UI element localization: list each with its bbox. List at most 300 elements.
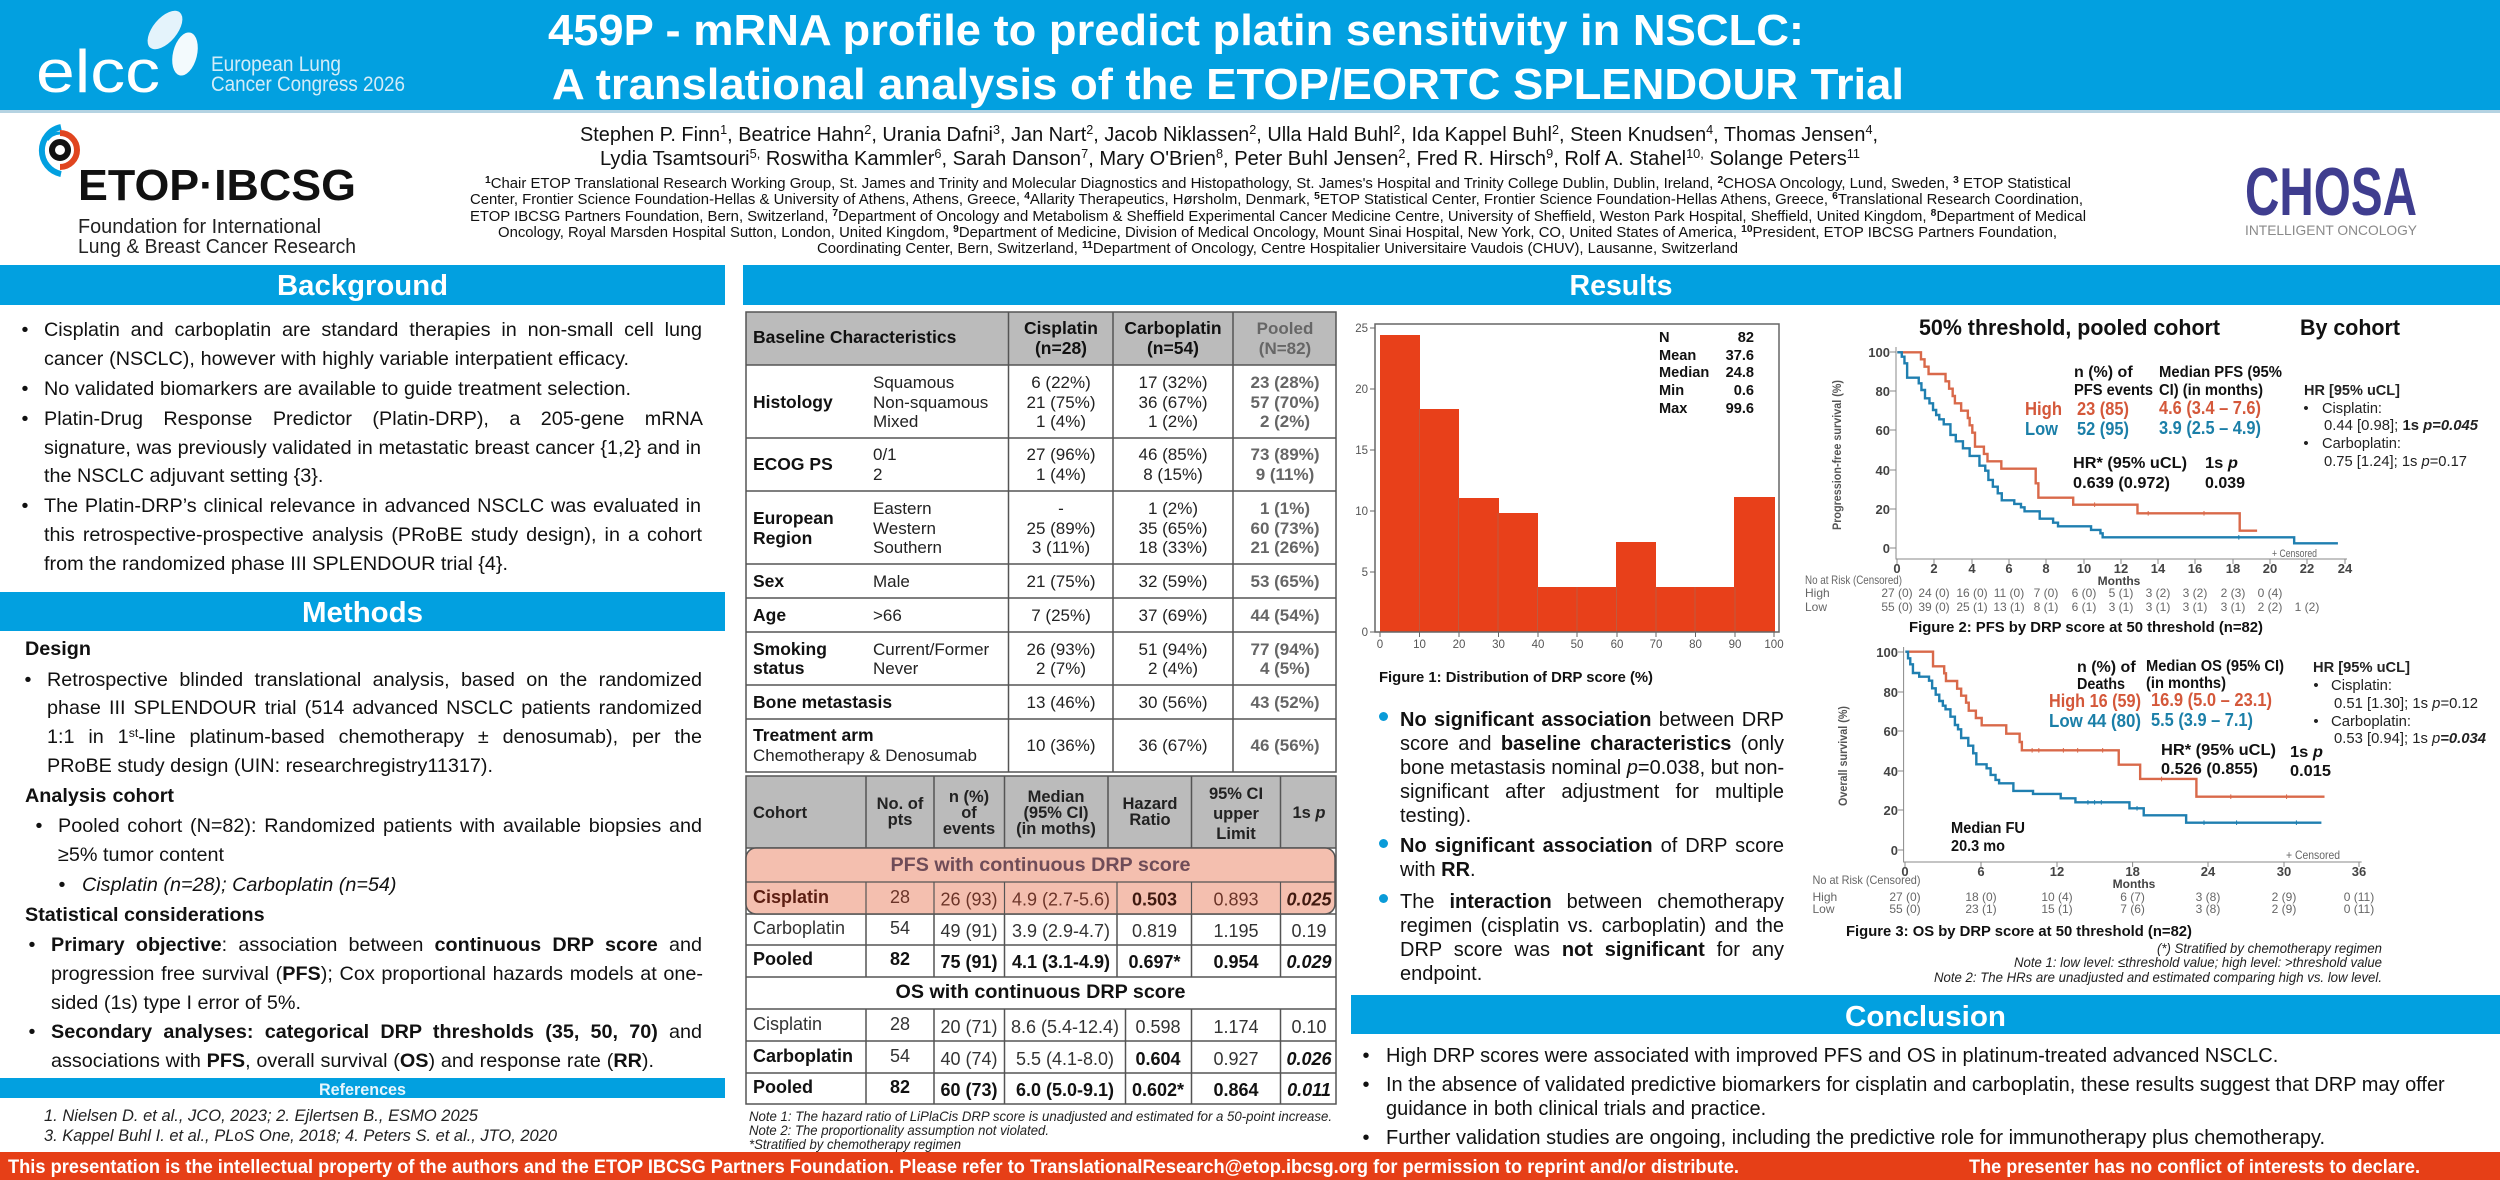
authors: , Steen Knudsen bbox=[1559, 123, 1706, 146]
histogram: DRP score distribution: 90 bbox=[1729, 639, 1741, 651]
panel: methods text: phase III SPLENDOUR trial (514 advanced NSCLC patients randomized bbox=[47, 697, 702, 719]
table: baseline characteristics: 26 (93%) bbox=[1027, 640, 1095, 659]
authors: 2 bbox=[1552, 122, 1559, 137]
table: baseline characteristics: 4 (5%) bbox=[1260, 659, 1310, 678]
footer bar: This presentation is the intellectual property of the authors and the ETOP IBCSG Partners Foundation. Please refer to TranslationalResearch@etop.ibcsg.org for permission to reprint and/or distribute. bbox=[8, 1156, 1739, 1178]
references list: 1. Nielsen D. et al., JCO, 2023; 2. Ejlertsen B., ESMO 2025 bbox=[44, 1107, 479, 1125]
chart: PFS Kaplan-Meier: 60 bbox=[1876, 423, 1890, 438]
highlight: cisplatin PFS row: Cisplatin bbox=[753, 887, 829, 907]
heading: Methods bbox=[0, 592, 725, 631]
authors: 9 bbox=[1546, 146, 1553, 161]
chart: PFS Kaplan-Meier: 8 bbox=[2042, 561, 2050, 576]
panel: results bullets: DRP score was not significant for any bbox=[1400, 939, 1784, 961]
table: baseline characteristics: 2 (4%) bbox=[1148, 659, 1198, 678]
chart: OS Kaplan-Meier: 100 bbox=[1876, 645, 1898, 660]
panel: results bullets: with RR. bbox=[1400, 859, 1476, 881]
table notes: Note 1: The hazard ratio of LiPlaCis DRP score is unadjusted and estimated for a 50-point increase. bbox=[749, 1108, 1332, 1124]
callout: OS statistics: n (%) of bbox=[2077, 659, 2136, 676]
callout: PFS statistics: 1s p bbox=[2205, 455, 2238, 472]
chart: PFS Kaplan-Meier: 18 bbox=[2226, 561, 2240, 576]
chart: OS Kaplan-Meier bbox=[1812, 645, 2374, 916]
table: baseline characteristics: Bone metastasis bbox=[753, 692, 892, 712]
table: cohort hazard ratios: Hazard bbox=[1122, 795, 1178, 813]
callout: PFS statistics: High bbox=[2025, 399, 2062, 419]
subheading: 50% threshold: 50% threshold, pooled cohort bbox=[1919, 315, 2221, 340]
table: cohort hazard ratios: 0.864 bbox=[1213, 1080, 1259, 1100]
panel: background text: • bbox=[22, 378, 28, 400]
references list bbox=[44, 1107, 558, 1145]
table: baseline characteristics: 1 (4%) bbox=[1036, 465, 1086, 484]
chart: PFS Kaplan-Meier: + Censored bbox=[2272, 548, 2317, 560]
chart: PFS Kaplan-Meier: 100 bbox=[1868, 345, 1890, 360]
panel: conclusion bullets bbox=[1362, 1045, 2445, 1149]
header banner bbox=[0, 0, 2500, 113]
histogram: DRP score distribution: 0 bbox=[1362, 627, 1368, 639]
chart: OS Kaplan-Meier: 12 bbox=[2050, 864, 2064, 879]
panel: results bullets: testing). bbox=[1400, 805, 1471, 827]
callout: OS by cohort: • bbox=[2313, 677, 2319, 694]
chart: OS Kaplan-Meier: 40 bbox=[1884, 764, 1898, 779]
chart: OS Kaplan-Meier: 0 bbox=[1901, 864, 1909, 879]
affiliations: 2 bbox=[1717, 175, 1724, 186]
panel: results bullets: significant after adjustment for multiple bbox=[1400, 781, 1784, 803]
chart: PFS Kaplan-Meier: Months bbox=[2098, 574, 2141, 588]
highlight: cisplatin PFS row: 26 (93) bbox=[940, 890, 998, 910]
callout: OS statistics: Median FU bbox=[1951, 820, 2025, 837]
table: baseline characteristics: 30 (56%) bbox=[1139, 693, 1207, 712]
affiliations: 1 bbox=[485, 175, 491, 186]
chart: PFS Kaplan-Meier: 24 bbox=[2338, 561, 2353, 576]
callout: PFS statistics: 4.6 (3.4 – 7.6) bbox=[2159, 398, 2261, 418]
table: cohort hazard ratios: of bbox=[961, 804, 977, 822]
table: PFS numbers at risk: 16 (0) bbox=[1956, 586, 1988, 600]
table: cohort hazard ratios: 0.819 bbox=[1132, 921, 1177, 941]
panel: background text bbox=[22, 319, 703, 575]
callout: PFS by cohort: • bbox=[2303, 435, 2309, 452]
authors: 2 bbox=[1249, 122, 1256, 137]
table: cohort hazard ratios: No. of bbox=[877, 795, 924, 813]
chart: PFS Kaplan-Meier: 0 bbox=[1893, 561, 1901, 576]
table: cohort hazard ratios: 3.9 (2.9-4.7) bbox=[1012, 921, 1110, 941]
affiliations: Allarity Therapeutics, Hørsholm, Denmark, bbox=[1030, 192, 1314, 208]
chart: PFS Kaplan-Meier: 2 bbox=[1930, 561, 1938, 576]
summary statistics: Min bbox=[1659, 383, 1684, 399]
chart: PFS Kaplan-Meier: 16 bbox=[2188, 561, 2202, 576]
table: PFS numbers at risk: 25 (1) bbox=[1956, 600, 1988, 614]
table: baseline characteristics: 2 bbox=[873, 465, 882, 484]
panel: conclusion bullets: • bbox=[1362, 1074, 1370, 1096]
table: OS numbers at risk: 55 (0) bbox=[1889, 902, 1921, 916]
heading: Results: Results bbox=[1570, 270, 1672, 302]
table: cohort hazard ratios: Carboplatin bbox=[753, 918, 845, 938]
table: baseline characteristics: Carboplatin bbox=[1124, 318, 1222, 338]
table: cohort hazard ratios: Ratio bbox=[1129, 811, 1171, 829]
histogram: DRP score distribution: 60 bbox=[1611, 639, 1623, 651]
callout: OS by cohort: 0.53 [0.94]; 1s p=0.034 bbox=[2334, 730, 2487, 747]
table: cohort hazard ratios: pts bbox=[888, 811, 912, 829]
affiliations bbox=[470, 175, 2086, 257]
table: cohort hazard ratios: 0.19 bbox=[1291, 921, 1327, 941]
table: baseline characteristics: Male bbox=[873, 572, 910, 591]
panel: methods text: • bbox=[24, 669, 31, 691]
callout: PFS by cohort bbox=[2303, 382, 2479, 470]
affiliations: Department of Oncology, Centre Hospitalier Universitaire Vaudois (CHUV), Lausanne, Switzerland bbox=[1093, 241, 1738, 257]
chart: PFS Kaplan-Meier: 22 bbox=[2300, 561, 2314, 576]
panel: background text: No validated biomarkers are available to guide treatment selection. bbox=[44, 378, 631, 400]
title: 459P - mRNA profile to predict platin sensitivity in NSCLC: bbox=[548, 6, 1804, 55]
table notes: *Stratified by chemotherapy regimen bbox=[749, 1136, 961, 1152]
heading: References: References bbox=[319, 1080, 406, 1099]
chart: OS Kaplan-Meier: 60 bbox=[1884, 724, 1898, 739]
summary statistics: 37.6 bbox=[1726, 348, 1754, 364]
callout: PFS statistics: Low bbox=[2025, 419, 2059, 439]
table: cohort hazard ratios: 4.1 (3.1-4.9) bbox=[1012, 952, 1110, 972]
table: baseline characteristics: Cisplatin bbox=[1024, 318, 1098, 338]
table: PFS numbers at risk: 8 (1) bbox=[2034, 600, 2058, 614]
table: cohort hazard ratios: 20 (71) bbox=[940, 1017, 998, 1037]
table: PFS numbers at risk: High bbox=[1805, 586, 1830, 600]
histogram: DRP score distribution bbox=[1355, 323, 1784, 651]
histogram: DRP score distribution: 10 bbox=[1355, 506, 1368, 518]
callout: OS statistics: Low 44 (80) bbox=[2049, 711, 2141, 731]
table: cohort hazard ratios: 28 bbox=[890, 1014, 910, 1034]
table: baseline characteristics: Chemotherapy & Denosumab bbox=[753, 746, 977, 765]
affiliations: ETOP IBCSG Partners Foundation, Bern, Switzerland, bbox=[470, 209, 819, 225]
histogram: DRP score distribution: 30 bbox=[1492, 639, 1505, 651]
authors bbox=[580, 122, 1878, 170]
references list: 3. Kappel Buhl I. et al., PLoS One, 2018; 4. Peters S. et al., JTO, 2020 bbox=[44, 1127, 558, 1145]
table: OS numbers at risk: No at Risk (Censored) bbox=[1812, 873, 1920, 887]
chart: PFS Kaplan-Meier: 20 bbox=[2263, 561, 2277, 576]
table: cohort hazard ratios: Pooled bbox=[753, 949, 813, 969]
authors: 1 bbox=[720, 122, 727, 137]
chart: PFS Kaplan-Meier: 10 bbox=[2077, 561, 2091, 576]
authors: , Thomas Jensen bbox=[1713, 123, 1865, 146]
summary statistics bbox=[1659, 330, 1754, 417]
table: baseline characteristics: 77 (94%) bbox=[1251, 640, 1319, 659]
table: baseline characteristics: 3 (11%) bbox=[1032, 538, 1090, 557]
callout: OS by cohort bbox=[2313, 659, 2487, 747]
chart: OS Kaplan-Meier: 36 bbox=[2352, 864, 2366, 879]
table: baseline characteristics: (n=28) bbox=[1035, 338, 1087, 358]
table: PFS numbers at risk: No at Risk (Censored) bbox=[1805, 573, 1902, 587]
affiliations: Oncology, Royal Marsden Hospital Sutton, London, United Kingdom, bbox=[498, 225, 938, 241]
affiliations: Chair ETOP Translational Research Working Group, St. James and Trinity and Molecular Diagnostics and Histopathology, St. James's Hospital and Trinity College Dublin, Dublin, Ireland, bbox=[491, 176, 1717, 192]
logo: CHOSA: CHOSA bbox=[2245, 154, 2417, 230]
table: cohort hazard ratios: 40 (74) bbox=[940, 1049, 998, 1069]
panel: methods text: • bbox=[28, 1021, 35, 1043]
table: PFS numbers at risk: 55 (0) bbox=[1881, 600, 1913, 614]
table: baseline characteristics: (N=82) bbox=[1259, 339, 1311, 358]
summary statistics: Max bbox=[1659, 401, 1688, 417]
callout: PFS by cohort: Cisplatin: bbox=[2322, 400, 2382, 417]
panel: background text: Platin-Drug Response Predictor (Platin-DRP), a 205-gene mRNA bbox=[44, 408, 703, 430]
table: baseline characteristics bbox=[746, 312, 1336, 772]
affiliations: 4 bbox=[1024, 191, 1030, 202]
table: cohort hazard ratios: 49 (91) bbox=[940, 921, 998, 941]
authors: , Ida Kappel Buhl bbox=[1400, 123, 1552, 146]
table: baseline characteristics: 53 (65%) bbox=[1251, 572, 1319, 591]
figure notes: (*) Stratified by chemotherapy regimen bbox=[2157, 940, 2382, 956]
logo: ELCC congress: Cancer Congress 2026 bbox=[211, 73, 405, 96]
table: PFS numbers at risk: 3 (1) bbox=[2146, 600, 2170, 614]
panel: background text: this retrospective-prospective analysis (PRoBE study design), in a cohort bbox=[44, 524, 702, 546]
authors: 2 bbox=[1086, 122, 1093, 137]
authors: 2 bbox=[1393, 122, 1400, 137]
logo: ELCC congress bbox=[36, 5, 405, 105]
authors: Lydia Tsamtsouri bbox=[600, 147, 753, 170]
chart: PFS Kaplan-Meier bbox=[1805, 345, 2353, 614]
footer bar bbox=[0, 1152, 2500, 1180]
callout: OS by cohort: Carboplatin: bbox=[2331, 713, 2411, 730]
panel: methods text: Primary objective: association between continuous DRP score and bbox=[51, 934, 702, 956]
callout: PFS by cohort: 0.44 [0.98]; 1s p=0.045 bbox=[2324, 417, 2479, 434]
authors: Roswitha Kammler bbox=[760, 147, 935, 170]
table: cohort hazard ratios: 6.0 (5.0-9.1) bbox=[1016, 1080, 1114, 1100]
panel: methods text: Secondary analyses: categorical DRP thresholds (35, 50, 70) and bbox=[51, 1021, 702, 1043]
authors: , Jacob Niklassen bbox=[1093, 123, 1249, 146]
logo: ETOP IBCSG: ETOP·IBCSG bbox=[78, 161, 356, 210]
table: cohort hazard ratios: Carboplatin bbox=[753, 1046, 853, 1066]
table: cohort hazard ratios: 75 (91) bbox=[940, 952, 998, 972]
table: baseline characteristics: 1 (2%) bbox=[1148, 499, 1198, 518]
panel: methods text: associations with PFS, overall survival (OS) and response rate (RR). bbox=[51, 1050, 654, 1072]
highlight: cisplatin PFS row: 28 bbox=[890, 887, 910, 907]
authors: 7 bbox=[1081, 146, 1088, 161]
table: cohort hazard ratios: 0.927 bbox=[1213, 1049, 1259, 1069]
table: cohort hazard ratios: 0.026 bbox=[1286, 1049, 1333, 1069]
table: cohort hazard ratios: OS with continuous DRP score bbox=[896, 981, 1186, 1003]
table: cohort hazard ratios: 60 (73) bbox=[940, 1080, 998, 1100]
callout: PFS statistics: PFS events bbox=[2074, 382, 2153, 399]
table: cohort hazard ratios: 0.954 bbox=[1213, 952, 1259, 972]
table: OS numbers at risk: 27 (0) bbox=[1889, 890, 1921, 904]
table: cohort hazard ratios: upper bbox=[1213, 805, 1259, 823]
table: baseline characteristics: Western bbox=[873, 519, 936, 538]
table: cohort hazard ratios: 0.598 bbox=[1135, 1017, 1181, 1037]
chart: OS Kaplan-Meier: 80 bbox=[1884, 685, 1898, 700]
table: baseline characteristics: Sex bbox=[753, 571, 784, 591]
curve: low DRP PFS bbox=[1897, 352, 2338, 543]
table: OS numbers at risk: High bbox=[1812, 890, 1837, 904]
table: baseline characteristics: - bbox=[1058, 499, 1064, 518]
table: baseline characteristics: 23 (28%) bbox=[1251, 373, 1319, 392]
authors: Stephen P. Finn bbox=[580, 123, 724, 146]
affiliations: Coordinating Center, Bern, Switzerland, bbox=[817, 241, 1072, 257]
authors: , Rolf A. Stahel bbox=[1553, 147, 1686, 170]
chart: PFS Kaplan-Meier: 4 bbox=[1968, 561, 1976, 576]
table: cohort hazard ratios: 82 bbox=[890, 949, 910, 969]
panel: methods text: Pooled cohort (N=82): Randomized patients with available biopsies and bbox=[58, 815, 702, 837]
authors: , bbox=[1872, 123, 1878, 146]
panel: conclusion bullets: Further validation studies are ongoing, including the predictive role for immunotherapy plus chemotherapy. bbox=[1386, 1127, 2325, 1149]
heading: References bbox=[0, 1078, 725, 1099]
callout: OS statistics: High 16 (59) bbox=[2049, 691, 2141, 711]
table: OS numbers at risk: 0 (11) bbox=[2344, 890, 2374, 904]
affiliations: ETOP Statistical Center, Frontier Science Foundation-Hellas Athens, Greece, bbox=[1320, 192, 1832, 208]
curve: high DRP PFS bbox=[1897, 352, 2257, 531]
callout: PFS statistics: 0.639 (0.972) bbox=[2073, 475, 2170, 492]
table: baseline characteristics: 13 (46%) bbox=[1027, 693, 1095, 712]
panel: results bullets: score and baseline characteristics (only bbox=[1400, 733, 1784, 755]
table: cohort hazard ratios: (in moths) bbox=[1016, 820, 1096, 838]
table: PFS numbers at risk bbox=[1805, 573, 2319, 614]
highlight: cisplatin PFS row: 4.9 (2.7-5.6) bbox=[1012, 890, 1110, 910]
table: PFS numbers at risk: 5 (1) bbox=[2109, 586, 2133, 600]
panel: background text: • bbox=[22, 495, 28, 517]
table: OS numbers at risk: 3 (8) bbox=[2196, 890, 2220, 904]
caption: figure 3: Figure 3: OS by DRP score at 50 threshold (n=82) bbox=[1846, 923, 2192, 940]
authors: 4 bbox=[1706, 122, 1713, 137]
table: cohort hazard ratios: 95% CI bbox=[1209, 785, 1263, 803]
highlight: cisplatin PFS row: 0.893 bbox=[1213, 890, 1259, 910]
panel: methods text: Statistical considerations bbox=[25, 904, 265, 926]
table: baseline characteristics: 36 (67%) bbox=[1139, 736, 1207, 755]
table: baseline characteristics: 1 (1%) bbox=[1260, 499, 1310, 518]
table: cohort hazard ratios: 0.011 bbox=[1287, 1080, 1331, 1100]
table: baseline characteristics: Baseline Characteristics bbox=[753, 327, 957, 347]
panel: results bullets: No significant association between DRP bbox=[1400, 709, 1784, 731]
table: OS numbers at risk: Low bbox=[1812, 902, 1835, 916]
chart: OS Kaplan-Meier: + Censored bbox=[2286, 848, 2340, 862]
chart: OS Kaplan-Meier: 6 bbox=[1977, 864, 1985, 879]
title bbox=[548, 6, 1904, 109]
table: cohort hazard ratios: 1s p bbox=[1292, 804, 1326, 822]
table: baseline characteristics: (n=54) bbox=[1147, 338, 1199, 358]
panel: methods text: • bbox=[36, 815, 42, 837]
callout: OS statistics: 0.015 bbox=[2290, 763, 2331, 780]
panel: methods text: • bbox=[58, 874, 65, 896]
affiliations: 5 bbox=[1314, 191, 1320, 202]
histogram: DRP score distribution: 100 bbox=[1764, 639, 1784, 651]
callout: PFS statistics: 52 (95) bbox=[2077, 419, 2129, 439]
callout: OS by cohort: Cisplatin: bbox=[2331, 677, 2392, 694]
table: baseline characteristics: 9 (11%) bbox=[1256, 465, 1314, 484]
table: baseline characteristics: 32 (59%) bbox=[1139, 572, 1207, 591]
callout: OS by cohort: HR [95% uCL] bbox=[2313, 659, 2410, 676]
authors: Solange Peters bbox=[1704, 147, 1847, 170]
authors: , Peter Buhl Jensen bbox=[1223, 147, 1398, 170]
logo: CHOSA bbox=[2245, 154, 2418, 238]
table: baseline characteristics: 1 (2%) bbox=[1148, 412, 1198, 431]
table: PFS numbers at risk: 11 (0) bbox=[1994, 586, 2024, 600]
callout: OS statistics bbox=[1951, 658, 2331, 855]
table: baseline characteristics: Mixed bbox=[873, 412, 918, 431]
callout: OS by cohort: • bbox=[2313, 713, 2319, 730]
table: OS numbers at risk: 23 (1) bbox=[1965, 902, 1997, 916]
figure notes: Note 1: low level: ≤threshold value; high level: >threshold value bbox=[2014, 954, 2382, 970]
table: PFS numbers at risk: 3 (1) bbox=[2109, 600, 2133, 614]
table notes: Note 2: The proportionality assumption not violated. bbox=[749, 1122, 1049, 1138]
table: PFS numbers at risk: 2 (3) bbox=[2221, 586, 2245, 600]
chart: PFS Kaplan-Meier: 0 bbox=[1883, 541, 1890, 556]
table: PFS numbers at risk: 3 (1) bbox=[2183, 600, 2207, 614]
histogram: DRP score distribution: 20 bbox=[1453, 639, 1465, 651]
table: baseline characteristics: 51 (94%) bbox=[1139, 640, 1207, 659]
highlight: cisplatin PFS row: 0.025 bbox=[1286, 890, 1333, 910]
chart: OS Kaplan-Meier: 20 bbox=[1884, 803, 1898, 818]
chart: OS Kaplan-Meier: 24 bbox=[2201, 864, 2216, 879]
table: baseline characteristics: Southern bbox=[873, 538, 942, 557]
table: cohort hazard ratios: Limit bbox=[1216, 825, 1256, 843]
authors: 11 bbox=[1847, 146, 1860, 161]
callout: OS statistics: 16.9 (5.0 – 23.1) bbox=[2151, 690, 2272, 710]
panel: results bullets: endpoint. bbox=[1400, 963, 1482, 985]
table: PFS numbers at risk: 24 (0) bbox=[1918, 586, 1950, 600]
footer bar: The presenter has no conflict of interests to declare. bbox=[1969, 1156, 2420, 1178]
affiliations: Department of Oncology and Metabolism & Sheffield Experimental Cancer Medicine Centre, University of Sheffield, Weston Park Hospital, Sheffield, United Kingdom, bbox=[838, 209, 1931, 225]
callout: PFS statistics: 3.9 (2.5 – 4.9) bbox=[2159, 418, 2261, 438]
panel: conclusion bullets: guidance in both clinical trials and practice. bbox=[1386, 1098, 1766, 1120]
table: cohort hazard ratios: Cohort bbox=[753, 804, 808, 822]
caption: figure 1: Figure 1: Distribution of DRP score (%) bbox=[1379, 669, 1653, 686]
table: OS numbers at risk: 0 (11) bbox=[2344, 902, 2374, 916]
table: cohort hazard ratios: 1.195 bbox=[1213, 921, 1259, 941]
callout: OS statistics: 0.526 (0.855) bbox=[2161, 761, 2258, 778]
panel: background text: signature, was previously validated in metastatic breast cancer {1,2} and in bbox=[44, 437, 701, 459]
table: baseline characteristics: 6 (22%) bbox=[1031, 373, 1091, 392]
title: A translational analysis of the ETOP/EORTC SPLENDOUR Trial bbox=[552, 60, 1904, 109]
histogram: DRP score distribution: 40 bbox=[1532, 639, 1544, 651]
panel: methods text: Design bbox=[25, 638, 91, 660]
callout: OS statistics: Deaths bbox=[2077, 676, 2125, 693]
callout: PFS statistics: n (%) of bbox=[2074, 364, 2133, 381]
panel: results bullets: No significant association of DRP score bbox=[1400, 835, 1784, 857]
authors: , Ulla Hald Buhl bbox=[1256, 123, 1393, 146]
authors: , Jan Nart bbox=[1000, 123, 1087, 146]
figure notes: Note 2: The HRs are unadjusted and estimated comparing high vs. low level. bbox=[1934, 969, 2382, 985]
authors: 6 bbox=[934, 146, 942, 161]
table: PFS numbers at risk: 13 (1) bbox=[1993, 600, 2025, 614]
table: cohort hazard ratios: 0.697* bbox=[1128, 952, 1181, 972]
logo: ETOP IBCSG: Lung & Breast Cancer Research bbox=[78, 236, 356, 258]
chart: PFS Kaplan-Meier: 6 bbox=[2005, 561, 2013, 576]
table: baseline characteristics: Non-squamous bbox=[873, 393, 988, 412]
table: baseline characteristics: Never bbox=[873, 659, 919, 678]
callout: PFS by cohort: • bbox=[2303, 400, 2309, 417]
table: baseline characteristics: 36 (67%) bbox=[1139, 393, 1207, 412]
panel: conclusion bullets: • bbox=[1362, 1045, 1370, 1067]
table: baseline characteristics: 43 (52%) bbox=[1251, 693, 1319, 712]
authors: 5, bbox=[750, 146, 760, 161]
callout: OS statistics: (in months) bbox=[2146, 675, 2226, 692]
heading: Results bbox=[743, 265, 2500, 305]
table: PFS numbers at risk: 3 (1) bbox=[2221, 600, 2245, 614]
panel: methods text: • bbox=[28, 934, 35, 956]
affiliations: Center, Frontier Science Foundation-Hellas & University of Athens, Athens, Greece, bbox=[470, 192, 1006, 208]
table: PFS numbers at risk: 3 (2) bbox=[2146, 586, 2170, 600]
authors: 10, bbox=[1686, 146, 1704, 161]
panel: results bullets: The interaction between chemotherapy bbox=[1400, 891, 1784, 913]
panel: methods text: ≥5% tumor content bbox=[58, 844, 224, 866]
table: cohort hazard ratios: 82 bbox=[890, 1077, 910, 1097]
authors: , Mary O'Brien bbox=[1088, 147, 1216, 170]
authors: , Sarah Danson bbox=[942, 147, 1081, 170]
authors: 4 bbox=[1865, 122, 1872, 137]
table: baseline characteristics: 2 (7%) bbox=[1036, 659, 1086, 678]
table: baseline characteristics: 10 (36%) bbox=[1027, 736, 1095, 755]
histogram: DRP score distribution: 15 bbox=[1355, 445, 1368, 457]
table: cohort hazard ratios: 54 bbox=[890, 918, 910, 938]
table: OS numbers at risk: 2 (9) bbox=[2272, 890, 2296, 904]
table: cohort hazard ratios: 0.029 bbox=[1286, 952, 1332, 972]
callout: OS statistics: 5.5 (3.9 – 7.1) bbox=[2151, 710, 2253, 730]
table notes bbox=[749, 1108, 1332, 1152]
table: OS numbers at risk: 6 (7) bbox=[2120, 890, 2145, 904]
panel: results bullets: regimen (cisplatin vs. carboplatin) and the bbox=[1400, 915, 1784, 937]
table: baseline characteristics: 0/1 bbox=[873, 445, 897, 464]
table: baseline characteristics: 37 (69%) bbox=[1139, 606, 1207, 625]
